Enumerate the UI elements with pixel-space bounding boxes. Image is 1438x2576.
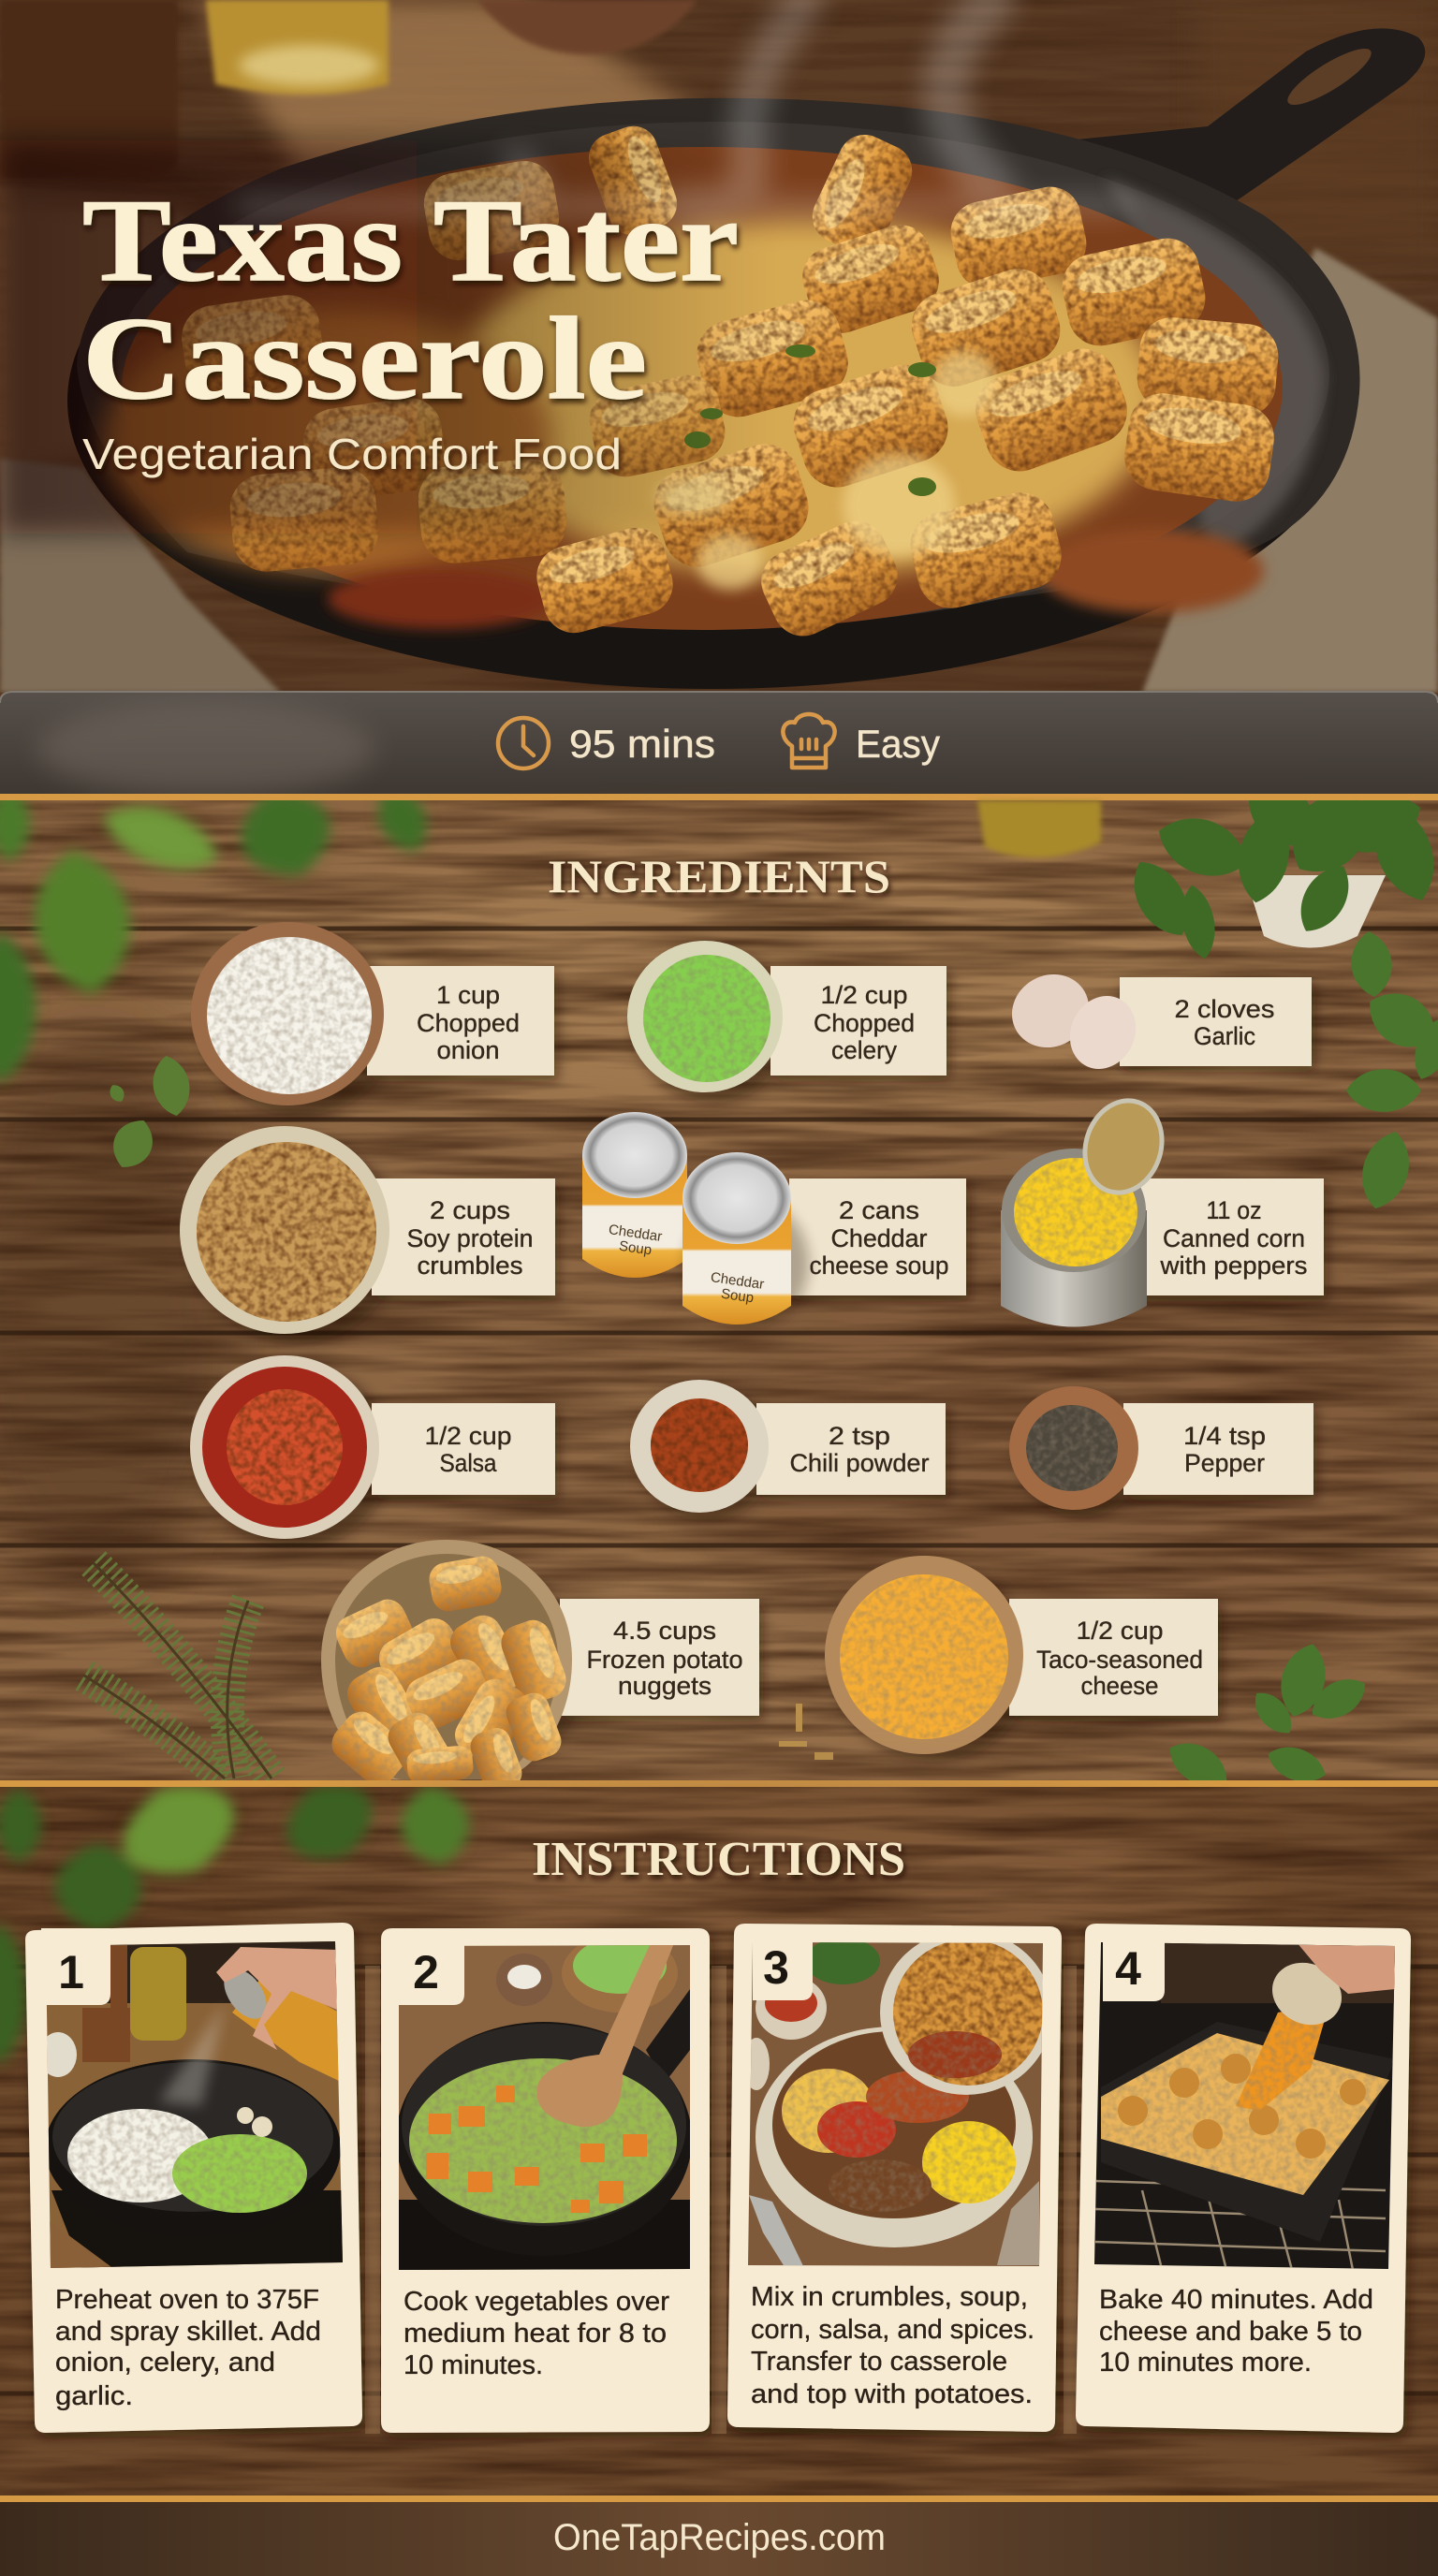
shredded cheese [1236,2003,1329,2111]
step card 3: and top with potatoes. [751,2379,1033,2409]
oil bottle [130,1947,186,2041]
step card 4: 4 [1115,1942,1141,1995]
hand [216,1947,337,2050]
stove [51,2190,343,2275]
step photo: cook vegetables [393,1934,697,2275]
steam [243,0,1123,243]
spray mist [159,2003,225,2106]
ingredient: cheddar cheese soup cans: 2 cans [839,1196,919,1224]
onion [67,2109,213,2203]
garlic [39,2032,77,2077]
garlic cloves [237,2107,254,2124]
small herb sprigs left [105,1053,195,1176]
wooden spoon [536,1943,674,2127]
herb sprigs right edge [1346,929,1438,1214]
ingredient: cheddar cheese soup cans: Soup [720,1286,755,1306]
baking dish [1101,2022,1395,2242]
ingredient: garlic: Garlic [1194,1022,1255,1050]
crumbs [779,1704,833,1760]
label text [417,981,520,1064]
ingredient: cheddar cheese soup cans: Cheddar [831,1224,928,1252]
stove [399,2200,690,2275]
ingredient: celery: celery [831,1036,897,1064]
step text [55,2285,321,2411]
label text: Chopped [417,1009,520,1037]
divider [0,1780,1438,1787]
ingredient: soy protein crumbles: crumbles [418,1251,522,1280]
ingredient: cheddar cheese soup cans: cheese soup [809,1251,949,1280]
icon: chef hat [783,714,835,768]
ingredient: frozen potato nuggets: Frozen potato [586,1646,743,1674]
ingredient: onion [191,922,554,1116]
heading: instructions: INSTRUCTIONS [532,1833,905,1886]
oil bottle top right [977,800,1101,857]
step text: Preheat oven to 375F [55,2285,319,2315]
ingredient: soy protein crumbles [180,1126,555,1343]
herb pot top right [1121,767,1438,961]
step photo: bake in oven [1086,1938,1400,2275]
bowl of potatoes [880,1930,1052,2095]
ingredient: salsa: Salsa [440,1449,497,1477]
number badge [41,1928,110,2005]
ingredient: cheddar cheese soup cans [582,1112,966,1329]
parsley sprig bottom right [1161,1638,1373,1796]
ingredient: frozen potato nuggets: 4.5 cups [613,1617,716,1645]
ingredient: canned corn with peppers [1001,1090,1324,1327]
difficulty: Easy [856,722,940,766]
step card 3: corn, salsa, and spices. [751,2315,1034,2345]
ingredient: taco-seasoned cheese: Taco-seasoned [1036,1646,1203,1674]
blurred leaves top left [0,776,438,1082]
rosemary sprig [84,1563,271,1778]
step card 2: 2 [413,1946,439,1998]
step card 1: 1 [58,1946,84,1998]
vegetables [409,2058,677,2223]
step photo: mix ingredients [743,1930,1052,2275]
ingredient: taco-seasoned cheese [825,1556,1218,1762]
step card 3: Transfer to casserole [751,2347,1007,2377]
step text: garlic. [55,2381,133,2411]
pepper mill [0,0,178,178]
skillet [396,2022,692,2256]
casserole [1101,2033,1389,2195]
label text: onion [436,1036,500,1064]
ingredient: pepper [1009,1386,1313,1517]
ingredient: canned corn with peppers: 11 oz [1206,1196,1262,1224]
step card 2: 10 minutes. [404,2350,543,2380]
cook time: 95 mins [569,722,715,766]
ingredient: celery: Chopped [814,1009,915,1037]
oil glass [206,0,389,95]
label text: 1 cup [436,981,500,1009]
step text: and spray skillet. Add [55,2317,321,2347]
step card 4: 10 minutes more. [1099,2348,1312,2378]
clay bowl background [477,0,697,54]
step card 4: Bake 40 minutes. Add [1099,2285,1373,2315]
title shading [0,140,768,534]
step text: onion, celery, and [55,2348,275,2378]
skillet handle [646,1989,690,2083]
ingredient: frozen potato nuggets [321,1540,759,1795]
ingredient: pepper: Pepper [1184,1449,1265,1477]
linen cloth [0,459,281,693]
ingredient: chili powder [630,1380,946,1521]
stats bar [0,692,1438,800]
skillet [45,2059,341,2237]
instructions section background [0,1787,1438,2496]
potato nuggets [178,119,1281,646]
melted cheese and herbs [655,351,997,590]
hand [1297,1942,1395,1994]
step card 3 [727,1924,1062,2432]
spray can [232,1972,339,2081]
ingredient: garlic: 2 cloves [1174,995,1275,1023]
ingredient: cheddar cheese soup cans: Cheddar [608,1222,663,1245]
ingredient: taco-seasoned cheese: cheese [1080,1672,1159,1700]
ingredient: garlic [999,960,1312,1080]
footer text: OneTapRecipes.com [553,2517,886,2558]
step card 2: Cook vegetables over [404,2287,669,2317]
bowl of celery [562,1934,678,2012]
step card 3: 3 [763,1941,789,1994]
ingredient: chili powder: 2 tsp [829,1422,890,1450]
ingredient: canned corn with peppers: Canned corn [1163,1224,1305,1252]
casserole filling [122,147,1283,630]
pepper mill [82,1945,130,2062]
ingredient: taco-seasoned cheese: 1/2 cup [1077,1617,1163,1645]
step card 4 [1076,1924,1411,2433]
pouring bowl [1262,1952,1352,2036]
icon: clock [498,718,549,768]
big mixing bowl [756,2027,1033,2247]
ingredient: frozen potato nuggets: nuggets [618,1672,712,1700]
step card 1 [25,1923,362,2433]
hero photo: skillet of casserole on wood table [0,0,1438,693]
ingredient: salsa [190,1355,555,1548]
ingredient: celery: 1/2 cup [820,981,908,1009]
title [82,176,739,424]
ingredient: canned corn with peppers: with peppers [1159,1251,1307,1280]
celery [172,2134,307,2213]
label card [367,966,554,1076]
step card 3: Mix in crumbles, soup, [751,2282,1028,2312]
skillet body [67,344,1293,689]
oven rack [1095,2181,1386,2270]
step card 4: cheese and bake 5 to [1099,2317,1362,2347]
ingredient: soy protein crumbles: Soy protein [406,1224,534,1252]
step card 2 [381,1928,710,2433]
spoon [749,2195,805,2270]
ingredient: soy protein crumbles: 2 cups [430,1196,510,1224]
ingredients section background: wood planks [0,800,1438,1781]
title: Casserole [82,294,647,424]
title: Texas Tater [82,176,739,306]
heading: ingredients: INGREDIENTS [548,850,890,902]
skillet handle [1078,28,1425,200]
ingredient: salsa: 1/2 cup [425,1422,511,1450]
ingredient: pepper: 1/4 tsp [1183,1422,1266,1450]
ingredient: chili powder: Chili powder [790,1449,929,1477]
ingredient: cheddar cheese soup cans: Cheddar [710,1269,765,1293]
footer bar [0,2496,1438,2576]
ingredient: cheddar cheese soup cans: Soup [618,1238,653,1258]
ingredient: celery [627,941,946,1103]
step card 2: medium heat for 8 to [404,2319,667,2349]
subtitle: Vegetarian Comfort Food [82,430,622,478]
blurred leaves instructions [0,1765,476,2064]
step photo: spray skillet [37,1938,346,2275]
